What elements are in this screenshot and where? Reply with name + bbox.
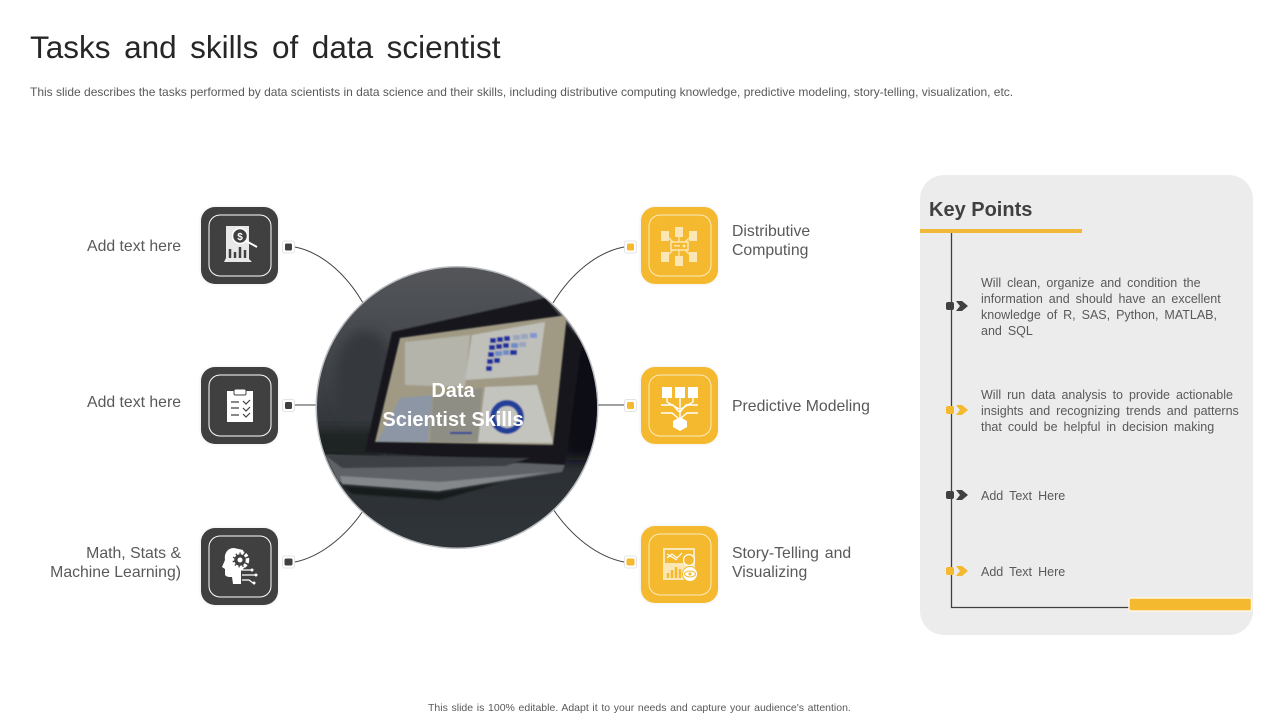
tile: checklist icon xyxy=(201,367,278,444)
title: Tasks and skills of data scientist xyxy=(30,29,500,65)
right label 1 xyxy=(732,223,810,259)
tile: machine learning icon xyxy=(201,528,278,605)
central photo circle xyxy=(310,260,610,555)
right label 1: Computing xyxy=(732,242,808,259)
left label 2: Add text here xyxy=(87,394,181,411)
right label 3: Story-Telling and xyxy=(732,545,851,562)
icon: documents into cube xyxy=(661,387,698,431)
tile: predictive modeling icon xyxy=(641,367,718,444)
key point 1: knowledge of R, SAS, Python, MATLAB, xyxy=(981,308,1217,322)
key point 4: Add Text Here xyxy=(981,565,1065,579)
key points top accent bar xyxy=(920,229,1082,233)
right label 2: Predictive Modeling xyxy=(732,398,870,415)
footer note: This slide is 100% editable. Adapt it to your needs and capture your audience's attention. xyxy=(428,702,851,714)
right label 1: Distributive xyxy=(732,223,810,240)
icon: dashboard with eye xyxy=(663,548,698,582)
icon: head with gear xyxy=(222,548,258,584)
connector node: left middle xyxy=(282,400,294,412)
key point 1 xyxy=(981,276,1221,338)
icon: network of documents xyxy=(661,227,697,266)
tile: story-telling icon xyxy=(641,526,718,603)
marker: point 1 xyxy=(946,301,968,311)
left label 3: Math, Stats & xyxy=(86,545,181,562)
left label 3 xyxy=(50,545,181,581)
tile: report icon xyxy=(201,207,278,284)
connector node: right bottom xyxy=(624,556,636,568)
key points bottom accent bar xyxy=(1129,598,1252,611)
key point 2: Will run data analysis to provide actionable xyxy=(981,388,1233,402)
marker: point 3 xyxy=(946,490,968,500)
connector node: left top xyxy=(282,241,294,253)
center label: Scientist Skills xyxy=(382,409,524,431)
left label 1: Add text here xyxy=(87,238,181,255)
key point 2: insights and recognizing trends and patterns xyxy=(981,404,1239,418)
key point 1: information and should have an excellent xyxy=(981,292,1221,306)
key point 2 xyxy=(981,388,1239,434)
connector lines xyxy=(295,247,624,562)
key point 1: Will clean, organize and condition the xyxy=(981,276,1201,290)
right label 3: Visualizing xyxy=(732,564,807,581)
marker: point 2 xyxy=(946,405,968,415)
connector node: left bottom xyxy=(282,556,294,568)
connector node: right middle xyxy=(624,400,636,412)
icon: dollar report: $ xyxy=(237,232,243,243)
marker: point 4 xyxy=(946,566,968,576)
tile: distributive computing icon xyxy=(641,207,718,284)
key point 3: Add Text Here xyxy=(981,489,1065,503)
key points timeline xyxy=(952,233,1130,608)
panel: key points background xyxy=(920,175,1253,635)
connector node: right top xyxy=(624,241,636,253)
key points heading: Key Points xyxy=(929,199,1032,221)
key point 1: and SQL xyxy=(981,324,1033,338)
left label 3: Machine Learning) xyxy=(50,564,181,581)
right label 3 xyxy=(732,545,851,581)
subtitle: This slide describes the tasks performed by data scientists in data science and their skills, including distributive computing knowledge, predictive modeling, story-telling, visualization, etc. xyxy=(30,85,1013,99)
icon: clipboard checklist xyxy=(227,389,253,422)
center label: Data xyxy=(431,380,475,402)
key point 2: that could be helpful in decision making xyxy=(981,420,1214,434)
center label xyxy=(382,380,524,431)
